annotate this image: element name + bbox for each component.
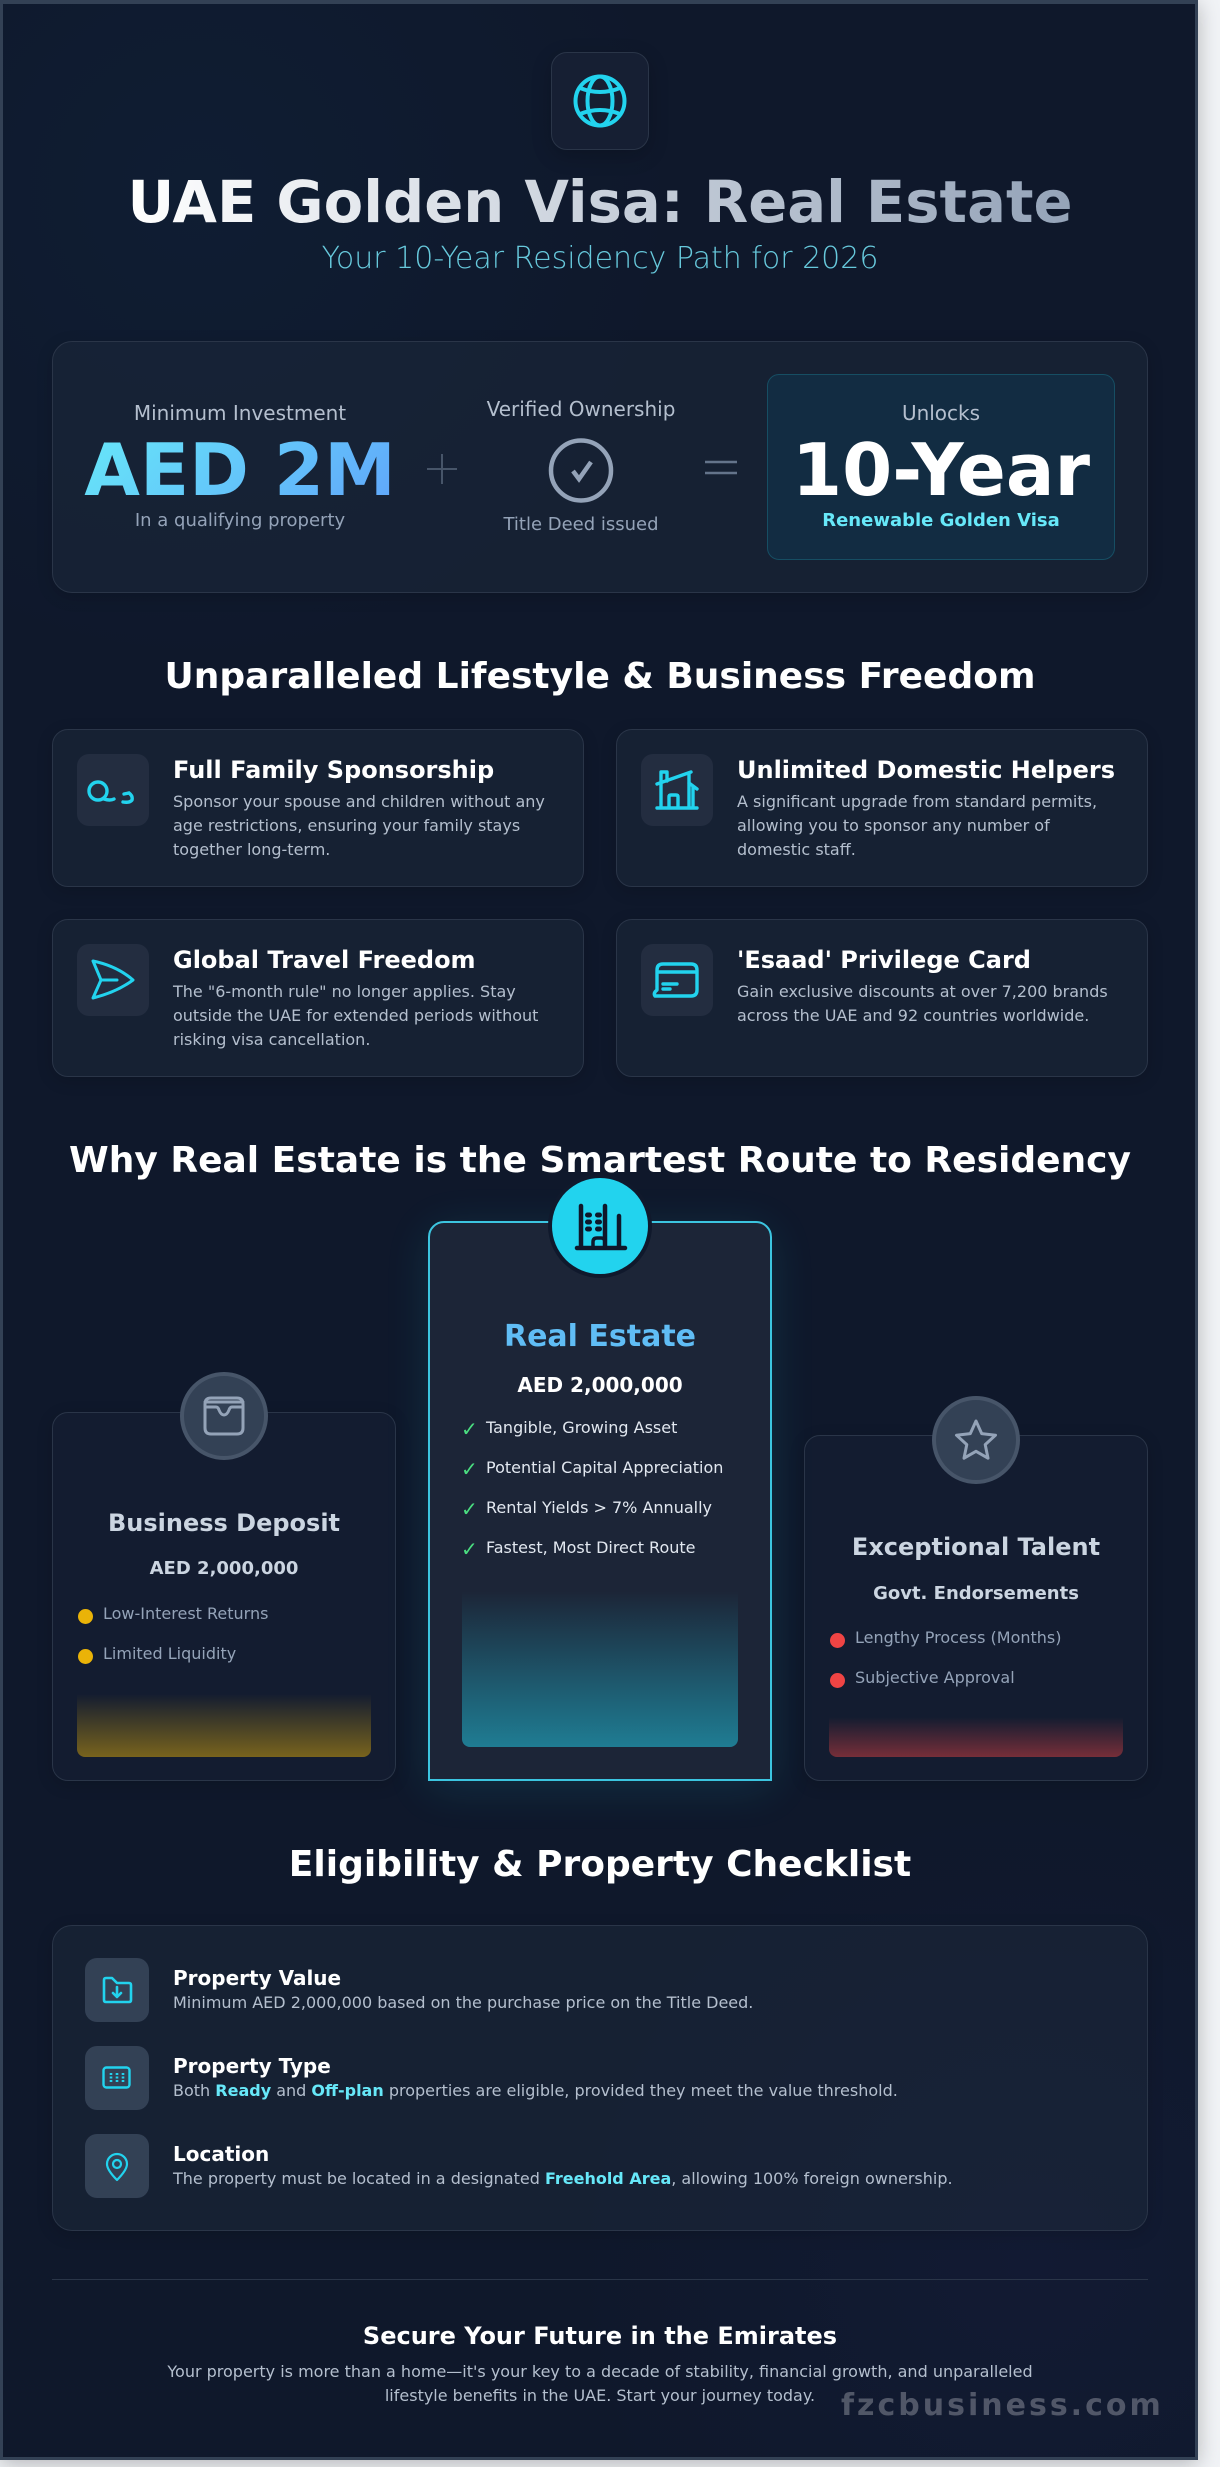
benefit: appreciation: Potential Capital Appreciation	[486, 1458, 723, 1477]
icon: family	[77, 754, 149, 826]
panel: exceptional talent	[804, 1435, 1148, 1781]
card text: allowing you to sponsor any number of	[737, 816, 1050, 835]
card text	[172, 982, 538, 1049]
card title: Exceptional Talent	[852, 1533, 1100, 1561]
item title: Location	[173, 2142, 269, 2166]
checklist item: property value	[85, 1958, 753, 2022]
card text: across the UAE and 92 countries worldwide.	[737, 1006, 1089, 1025]
icon: keypad	[85, 2046, 149, 2110]
item text: Minimum AED 2,000,000 based on the purchase price on the Title Deed.	[173, 1993, 753, 2012]
card text	[737, 982, 1108, 1025]
card title: 'Esaad' Privilege Card	[737, 946, 1031, 974]
card price: AED 2,000,000	[517, 1373, 683, 1397]
card title: Global Travel Freedom	[173, 946, 476, 974]
benefit: yields: ✓	[461, 1497, 478, 1521]
title: UAE Golden Visa: Real Estate	[127, 169, 1073, 236]
subtitle: Your 10-Year Residency Path for 2026	[322, 241, 878, 276]
item title: Property Value	[173, 1966, 341, 1990]
drawback: returns: Low-Interest Returns	[103, 1604, 268, 1623]
card: family sponsorship	[52, 729, 584, 887]
footer text	[167, 2362, 1033, 2405]
checklist item: location	[85, 2134, 953, 2198]
benefit: route: Fastest, Most Direct Route	[486, 1538, 696, 1557]
card text	[737, 792, 1097, 859]
bar: amber	[77, 1694, 371, 1757]
card text: together long-term.	[173, 840, 330, 859]
card text: Gain exclusive discounts at over 7,200 brands	[737, 982, 1108, 1001]
label: verified ownership: Verified Ownership	[487, 397, 675, 421]
item text: The property must be located in a designated Freehold Area, allowing 100% foreign ownership.	[173, 2169, 953, 2188]
caption: renewable visa: Renewable Golden Visa	[822, 510, 1060, 531]
card title: Business Deposit	[108, 1509, 340, 1537]
icon: globe	[551, 52, 649, 150]
label: unlocks: Unlocks	[902, 401, 980, 425]
icon: building	[552, 1178, 648, 1274]
panel: checklist	[52, 1925, 1148, 2231]
benefit: asset: ✓	[461, 1417, 478, 1441]
heading: smartest route: Why Real Estate is the Smartest Route to Residency	[69, 1140, 1131, 1181]
card text: age restrictions, ensuring your family stays	[173, 816, 520, 835]
card text: risking visa cancellation.	[173, 1030, 370, 1049]
drawback: process: Lengthy Process (Months)	[855, 1628, 1062, 1647]
benefit: asset: Tangible, Growing Asset	[486, 1418, 677, 1437]
icon: paper plane	[77, 944, 149, 1016]
icon: pin	[85, 2134, 149, 2198]
benefit: yields: Rental Yields > 7% Annually	[486, 1498, 712, 1517]
benefit: appreciation: ✓	[461, 1457, 478, 1481]
benefit: route: ✓	[461, 1537, 478, 1561]
drawback: approval: Subjective Approval	[855, 1668, 1015, 1687]
card price: Govt. Endorsements	[873, 1583, 1079, 1604]
watermark: fzcbusiness.com	[841, 2388, 1164, 2423]
equals sign	[705, 460, 737, 474]
card text: Sponsor your spouse and children without any	[173, 792, 545, 811]
caption: title deed: Title Deed issued	[503, 514, 659, 535]
panel: business deposit	[52, 1412, 396, 1781]
card price: AED 2,000,000	[150, 1558, 298, 1579]
card text: A significant upgrade from standard permits,	[737, 792, 1097, 811]
card: esaad	[616, 919, 1148, 1077]
icon: privilege card	[641, 944, 713, 1016]
bar: red	[829, 1717, 1123, 1757]
heading: checklist: Eligibility & Property Checklist	[289, 1844, 911, 1885]
card text: outside the UAE for extended periods without	[173, 1006, 538, 1025]
card title: Unlimited Domestic Helpers	[737, 756, 1115, 784]
panel: visa equation	[52, 341, 1148, 593]
icon: star	[932, 1396, 1020, 1484]
panel: unlocks	[767, 374, 1115, 560]
icon: house	[641, 754, 713, 826]
card title: Full Family Sponsorship	[173, 756, 494, 784]
footer text: Your property is more than a home—it's your key to a decade of stability, financial growth, and unparalleled	[167, 2362, 1033, 2381]
icon: folder	[85, 1958, 149, 2022]
panel: real estate	[428, 1221, 772, 1781]
figure: 10-Year: 10-Year	[792, 428, 1090, 512]
bar: cyan	[462, 1591, 738, 1747]
card text: domestic staff.	[737, 840, 856, 859]
item title: Property Type	[173, 2054, 331, 2078]
footer text: lifestyle benefits in the UAE. Start your journey today.	[385, 2386, 815, 2405]
card text	[173, 792, 545, 859]
drawback: liquidity: Limited Liquidity	[103, 1644, 236, 1663]
icon: wallet	[180, 1372, 268, 1460]
item text: Both Ready and Off-plan properties are eligible, provided they meet the value threshold.	[173, 2081, 898, 2100]
benefit: asset	[461, 1417, 678, 1441]
checklist item: property type	[85, 2046, 898, 2110]
card title: Real Estate	[504, 1319, 696, 1354]
label: minimum investment: Minimum Investment	[134, 401, 346, 425]
card: domestic helpers	[616, 729, 1148, 887]
caption: qualifying property: In a qualifying property	[135, 510, 345, 531]
footer heading: Secure Your Future in the Emirates	[363, 2322, 837, 2350]
icon: verified check	[548, 438, 614, 503]
heading: lifestyle: Unparalleled Lifestyle & Business Freedom	[165, 656, 1035, 697]
figure: AED 2M: AED 2M	[84, 428, 396, 512]
card text: The "6-month rule" no longer applies. Stay	[173, 982, 516, 1001]
card: travel freedom	[52, 919, 584, 1077]
plus sign	[427, 454, 457, 484]
